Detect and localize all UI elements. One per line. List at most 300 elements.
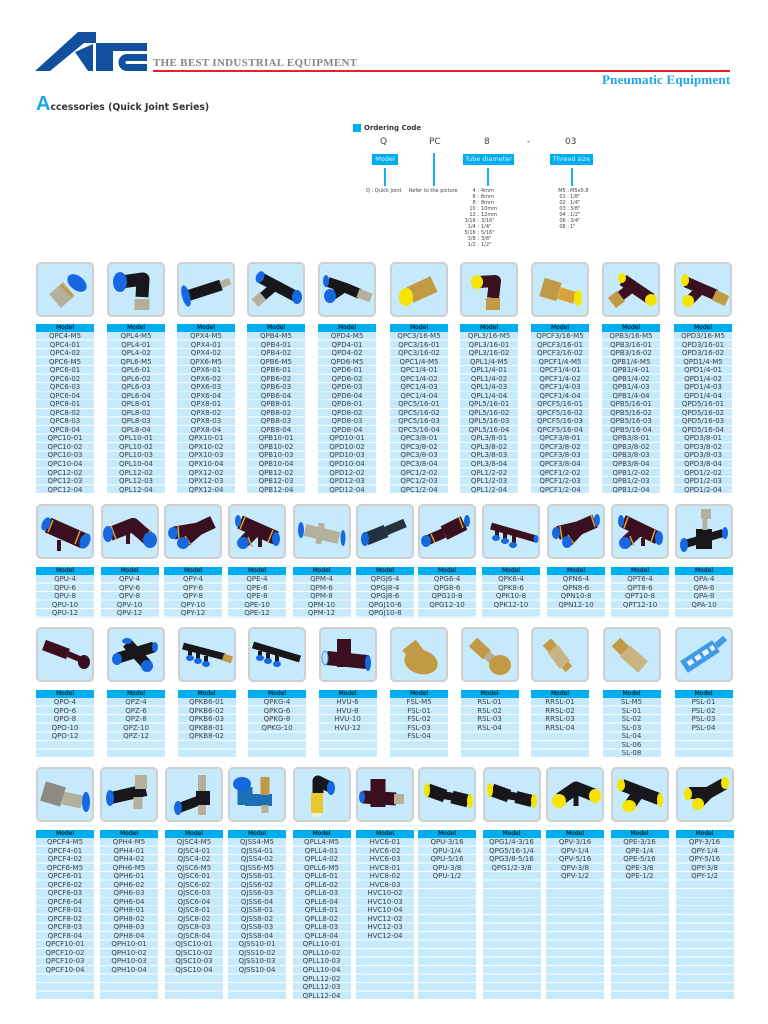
thread size list: 02 :	[559, 200, 569, 206]
table: HVU models: HVU-8	[336, 707, 359, 715]
table: QPL inch models: QPL3/16-02	[469, 349, 509, 357]
code parts: -	[527, 137, 530, 147]
table: QPO models: QPO-10	[52, 724, 78, 732]
table: QPH models: QPH10-02	[111, 949, 147, 957]
table: QPB models: QPB4-02	[261, 349, 291, 357]
table: QPV models: QPV-8	[119, 592, 140, 600]
table: QPB inch models: QPB1/4-04	[612, 392, 650, 400]
photo: QPG inch reducer	[482, 767, 540, 822]
photo: QPX fitting	[177, 262, 235, 317]
table: QPX models: QPX8-02	[191, 409, 221, 417]
table: QPU models: QPU-8	[54, 592, 76, 600]
table: QPD models: Model	[338, 324, 356, 331]
table: QPLL models: QPLL12-04	[303, 992, 340, 1000]
photo: QPN wye	[547, 504, 605, 559]
table: QPL models: QPL6-02	[121, 375, 151, 383]
table: QPC models: QPC12-03	[48, 477, 82, 485]
table: QPT models: QPT8-6	[627, 584, 653, 592]
table: QPV inch models	[546, 830, 604, 1000]
table: QPGJ models: QPGJ6-4	[371, 575, 399, 583]
tube diameter list: 3/8"	[481, 236, 491, 242]
table: QPL models: QPL6-03	[121, 383, 151, 391]
table: QPE models	[228, 566, 286, 618]
table: QPL models: QPL4-M5	[120, 332, 152, 340]
table: QPB inch models: QPB1/2-04	[612, 486, 650, 494]
table: QPO models: QPO-12	[52, 732, 78, 740]
table: QPT models: QPT12-10	[623, 600, 657, 608]
table: QPL models: QPL10-01	[119, 434, 153, 442]
table: QPL inch models: QPL3/8-01	[471, 434, 507, 442]
thread size list: 03 :	[559, 206, 569, 212]
column: QPCF	[36, 767, 94, 1000]
table: QPO models: QPO-8	[54, 715, 76, 723]
table: HVC models: HVC6-01	[370, 838, 400, 846]
table: QPCF inch models: QPCF3/8-03	[539, 451, 581, 459]
table: QPD models: QPD12-04	[329, 486, 365, 494]
table: QPCF models	[36, 830, 94, 1000]
table: HVC models: HVC12-03	[367, 923, 403, 931]
thread size list	[558, 188, 588, 230]
table: QPE inch models: QPE-5/16	[623, 855, 656, 863]
table: HVC models: HVC12-02	[367, 915, 403, 923]
table: QPLL models: QPLL4-01	[305, 847, 338, 855]
photo: QPG reducer	[418, 504, 476, 559]
table: QPCF inch models: QPCF3/8-01	[539, 434, 581, 442]
table: QPL models: QPL8-03	[121, 417, 151, 425]
table: QPY models: QPY-6	[183, 584, 203, 592]
table: QPL inch models: QPL1/2-04	[471, 486, 507, 494]
table: QPL models: QPL8-04	[121, 426, 151, 434]
table: QPY models: QPY-10	[181, 600, 205, 608]
table: QPX models: QPX6-04	[191, 392, 221, 400]
column: QPB inch	[602, 262, 660, 494]
table: QPO models: QPO-6	[54, 707, 76, 715]
table: QJSC models: QJSC10-02	[175, 949, 213, 957]
table: QPE models: QPE-8	[246, 592, 268, 600]
title: Accessories (Quick Joint Series): Accessories (Quick Joint Series)	[36, 93, 209, 115]
table: QPH models: QPH10-04	[111, 966, 147, 974]
table: QJSC models: QJSC10-03	[175, 957, 213, 965]
thread size list: M5x0.8	[570, 188, 588, 194]
column: QPT	[611, 504, 669, 617]
table: QPLL models: QPLL8-01	[305, 906, 338, 914]
column: QPV inch	[546, 767, 604, 1000]
tube diameter list: 12mm	[481, 212, 497, 218]
thread size list: 1/8"	[570, 194, 580, 200]
table: QPY inch models: QPY-3/16	[689, 838, 720, 846]
table: QPB models: QPB4-01	[261, 341, 291, 349]
table: QPD models: QPD6-M5	[331, 358, 363, 366]
table: QPD inch models: QPD5/16-01	[682, 400, 724, 408]
table: QPL inch models: QPL3/8-04	[471, 460, 507, 468]
table: QPK models: QPK6-4	[498, 575, 524, 583]
table: QJSS models: QJSS8-02	[241, 915, 273, 923]
table: QPL inch models: QPL3/8-03	[471, 451, 507, 459]
table: QPB models: QPB6-04	[261, 392, 291, 400]
table: QPKB models: QPKB6-01	[189, 698, 224, 706]
table: QPB models: QPB6-M5	[260, 358, 292, 366]
table: QPD models: QPD8-01	[331, 400, 362, 408]
photo: QPCF brass fitting	[531, 262, 589, 317]
table: QPM models: QPM-12	[308, 609, 335, 617]
ordering code icon	[353, 124, 361, 132]
column: QPC inch	[390, 262, 448, 494]
thread size list: 06 :	[559, 218, 569, 224]
table: QJSS models: QJSS10-04	[239, 966, 275, 974]
photo: QPB tee	[247, 262, 305, 317]
column: QPY	[164, 504, 222, 618]
ordering code heading: Ordering Code	[364, 124, 421, 132]
photo: QPM bulkhead	[292, 504, 350, 559]
table: QPY inch models	[676, 830, 734, 1000]
table: QPB models: QPB6-02	[261, 375, 291, 383]
table: QPY models	[164, 566, 222, 618]
table: QPC inch models: QPC1/4-02	[400, 375, 438, 383]
table: QPK models: QPK12-10	[494, 600, 528, 608]
table: QPD inch models: QPD3/16-02	[682, 349, 724, 357]
table: QPL inch models: QPL1/4-01	[471, 366, 507, 374]
table: QPC models: Model	[56, 324, 74, 331]
table: QPLL models: QPLL10-04	[303, 966, 340, 974]
table: QPL models: QPL12-02	[119, 468, 153, 476]
table: QPL models: QPL6-04	[121, 392, 151, 400]
table: QPLL models: QPLL12-02	[303, 974, 340, 982]
table: QPCF inch models: QPCF1/2-04	[539, 486, 581, 494]
table: QPU inch models	[418, 830, 476, 1000]
photo: QJSS speed controller	[228, 767, 286, 822]
table: QPC inch models: QPC1/2-04	[400, 486, 438, 494]
photo: QPD tee	[318, 262, 376, 317]
table: QPL models: QPL8-01	[121, 400, 151, 408]
table: QPB inch models: QPB3/16-02	[610, 349, 652, 357]
table: QPB models: QPB10-04	[259, 460, 293, 468]
table: QPH models: Model	[120, 830, 138, 837]
column: RRSL	[531, 627, 589, 758]
table: QPCF models: QPCF6-M5	[47, 864, 83, 872]
table: QPLL models: QPLL6-M5	[304, 864, 339, 872]
column: QPKG	[248, 627, 306, 758]
table: HVC models: HVC6-02	[370, 847, 400, 855]
table: QPE models: Model	[248, 567, 266, 574]
table: QPLL models: QPLL6-04	[305, 898, 338, 906]
table: QPU models: Model	[56, 567, 74, 574]
tube diameter list: 4mm	[481, 188, 494, 194]
table: QPB inch models: QPB3/16-01	[610, 341, 652, 349]
table: QPD models: QPD12-02	[329, 468, 365, 476]
table: QPCF inch models: QPCF3/8-04	[539, 460, 581, 468]
table: QJSC models: QJSC6-04	[178, 898, 210, 906]
column: QJSC	[165, 767, 223, 1000]
table: QPD inch models: QPD1/4-01	[684, 366, 722, 374]
table: QPC inch models: QPC3/16-02	[398, 349, 440, 357]
column: RSL	[460, 627, 518, 758]
table: QPGJ models: Model	[376, 567, 394, 574]
table: QPCF inch models: QPCF3/16-M5	[536, 332, 584, 340]
tube diameter list: 3/16 :	[464, 218, 479, 224]
column: QPA	[675, 504, 733, 617]
table: QPB inch models: QPB5/16-01	[610, 400, 652, 408]
table: QPU models: QPU-10	[52, 600, 78, 608]
table: QPY models: QPY-4	[183, 575, 203, 583]
table: QPY inch models: Model	[695, 830, 714, 837]
table: QPU inch models: QPU-1/2	[433, 872, 461, 880]
table: QPH models: QPH6-04	[114, 898, 144, 906]
table: QPE inch models: QPE-1/2	[626, 872, 653, 880]
table: QPB models: QPB6-03	[261, 383, 291, 391]
table: QPL inch models: QPL5/16-03	[469, 417, 509, 425]
table: QJSC models: QJSC10-04	[175, 966, 213, 974]
table: QPC models: QPC8-02	[50, 409, 80, 417]
photo: QPKB manifold	[178, 627, 236, 682]
table: QPY models: Model	[184, 567, 202, 574]
table: QPU inch models: Model	[438, 830, 456, 837]
table: QPA models: QPA-10	[691, 600, 717, 608]
table: QPLL models: QPLL8-03	[305, 923, 338, 931]
tube diameter list: 5/16 :	[464, 230, 479, 236]
photo: QPGJ reducer	[356, 504, 414, 559]
table: QPD inch models: QPD1/4-03	[684, 383, 722, 391]
table: HVU models: HVU-6	[336, 698, 359, 706]
photo: QPD inch tee	[674, 262, 732, 317]
table: QPX models: QPX4-02	[191, 349, 221, 357]
table: QPC inch models: QPC3/16-01	[398, 341, 440, 349]
photo: QPV elbow	[100, 504, 158, 559]
table: QPB models	[247, 324, 305, 494]
table: QPB inch models: Model	[622, 324, 640, 331]
table: QPD models: QPD6-04	[331, 392, 362, 400]
table: PSL models	[674, 690, 732, 758]
table: RRSL models	[531, 690, 589, 758]
table: QPK models	[482, 567, 540, 618]
photo: QPC brass fitting	[390, 262, 448, 317]
table: QPC inch models: QPC1/2-02	[400, 468, 438, 476]
table: HVC models	[356, 830, 414, 1000]
photo: QPY wye	[164, 504, 222, 559]
table: QPU models: QPU-4	[54, 575, 76, 583]
thread size list: 08 :	[559, 224, 569, 230]
table: QPCF inch models: QPCF3/8-02	[539, 443, 581, 451]
box: Model: Model	[375, 155, 395, 163]
table: QPG inch models	[482, 830, 540, 1000]
table: QPCF models: Model	[56, 830, 74, 837]
table: QPH models: QPH10-03	[111, 957, 147, 965]
table: QPC models: QPC10-01	[48, 434, 82, 442]
table: QPCF inch models: QPCF1/2-03	[539, 477, 581, 485]
table: QPL models: QPL10-04	[119, 460, 153, 468]
table: QPC inch models: QPC1/4-04	[400, 392, 438, 400]
table: QPV models	[101, 566, 159, 618]
table: QPCF models: QPCF8-01	[48, 906, 82, 914]
table: QPX models: QPX10-02	[189, 443, 223, 451]
table: HVU models: HVU-12	[334, 724, 361, 732]
table: QPO models	[36, 690, 94, 758]
table: QPH models: QPH10-01	[111, 940, 147, 948]
column: QPV	[101, 504, 159, 618]
table: RSL models	[460, 690, 518, 758]
table: QPB models: QPB8-03	[261, 417, 291, 425]
table: QPA models: QPA-8	[694, 592, 714, 600]
table: QPB inch models: QPB1/4-02	[612, 375, 650, 383]
column: PSL	[674, 627, 732, 758]
table: QPT models: Model	[631, 567, 649, 574]
table: QPZ models: QPZ-6	[125, 707, 147, 715]
table: QPLL models: QPLL4-02	[305, 855, 338, 863]
table: HVC models: HVC10-04	[367, 906, 403, 914]
box: Thread size	[550, 154, 593, 165]
table: QPGJ models: QPGJ8-4	[371, 584, 399, 592]
table: QJSC models	[165, 830, 223, 1000]
table: QJSS models: QJSS6-M5	[240, 864, 274, 872]
table: PSL models: PSL-03	[692, 715, 715, 723]
column: QPB	[247, 262, 305, 494]
table: QPU inch models: QPU-3/8	[433, 864, 461, 872]
thread size list: M5 :	[558, 188, 569, 194]
table: QPD models: QPD4-02	[331, 349, 362, 357]
table: QPC models: QPC6-M5	[49, 358, 81, 366]
table: QJSC models: QJSC4-M5	[177, 838, 211, 846]
table: QPX models: QPX12-02	[189, 468, 223, 476]
photo: FSL silencer	[390, 627, 448, 682]
photo: QPA speed controller	[675, 504, 733, 559]
tube diameter list: 10mm	[481, 206, 497, 212]
table: QPL models: QPL6-01	[121, 366, 151, 374]
table: QPB models: QPB6-01	[261, 366, 291, 374]
table: HVC models: HVC8-03	[370, 881, 400, 889]
table: QPB inch models: QPB3/8-02	[612, 443, 650, 451]
table: QPD models: QPD10-01	[329, 434, 365, 442]
table: QPKG models: QPKG-4	[264, 698, 290, 706]
section label: Pneumatic Equipment: Pneumatic Equipment	[602, 72, 730, 87]
table: QPD inch models: QPD3/8-01	[684, 434, 722, 442]
table: QPL inch models	[460, 324, 518, 494]
panel: ordering code	[353, 124, 593, 248]
thread size list: 01 :	[559, 194, 569, 200]
table: QPB inch models: QPB1/2-03	[612, 477, 650, 485]
table: QPH models: QPH4-02	[114, 855, 144, 863]
table: QPC inch models: QPC3/8-02	[400, 443, 438, 451]
column: QPCF inch	[531, 262, 589, 494]
table: QPV inch models: QPV-3/16	[559, 838, 591, 846]
column: QJSS	[228, 767, 286, 1000]
table: QPH models	[100, 830, 158, 1000]
table: QPL models: QPL10-02	[119, 443, 153, 451]
table: QPLL models: QPLL8-02	[305, 915, 338, 923]
table: QPX models: QPX8-03	[191, 417, 221, 425]
table: QPN models: QPN12-10	[558, 600, 594, 608]
table: QPL inch models: QPL1/2-02	[471, 468, 507, 476]
photo: HVC valve	[356, 767, 414, 822]
photo: QPL inch elbow	[460, 262, 518, 317]
column: QPZ	[107, 627, 165, 758]
table: SL models: SL-M5	[621, 698, 642, 706]
column: QPL inch	[460, 262, 518, 494]
table: RSL models: Model	[480, 690, 498, 697]
column: QPKB	[178, 627, 236, 758]
box: Model	[372, 154, 398, 165]
code parts: 8	[484, 137, 490, 147]
table: QPL inch models: QPL3/16-M5	[468, 332, 510, 340]
photo: QPT tee	[611, 504, 669, 559]
table: QPZ models: QPZ-8	[125, 715, 147, 723]
table: QPT models: QPT10-8	[625, 592, 655, 600]
table: QPM models: Model	[312, 567, 330, 574]
table: QPB inch models: QPB3/8-03	[612, 451, 650, 459]
table: QJSC models: QJSC8-02	[178, 915, 210, 923]
table: QPCF inch models: QPCF5/16-03	[537, 417, 583, 425]
table: QPO models: Model	[56, 690, 74, 697]
table: QPCF inch models: QPCF1/4-03	[539, 383, 581, 391]
table: QJSC models: QJSC4-01	[178, 847, 210, 855]
table: QPC models: QPC4-02	[50, 349, 80, 357]
table: QJSS models: QJSS4-M5	[240, 838, 274, 846]
table: QPC models: QPC10-04	[48, 460, 82, 468]
table: QPL inch models: QPL5/16-01	[469, 400, 509, 408]
table: HVU models: HVU-10	[334, 715, 361, 723]
table: QPL models: QPL8-02	[121, 409, 151, 417]
photo: QPL elbow	[107, 262, 165, 317]
table: QPZ models: QPZ-12	[123, 732, 149, 740]
table: QPC models: QPC8-04	[50, 426, 80, 434]
tube diameter list: 8mm	[481, 200, 494, 206]
table: QPG models: QPG10-8	[431, 592, 463, 600]
table: RRSL models: Model	[551, 690, 569, 697]
table: QPD inch models: QPD1/4-02	[684, 375, 722, 383]
table: QPH models: QPH6-02	[114, 881, 144, 889]
table: PSL models: PSL-01	[692, 698, 715, 706]
table: QPLL models: QPLL10-01	[303, 940, 340, 948]
table: QPN models: Model	[567, 567, 585, 574]
table: QPB inch models: QPB3/8-01	[612, 434, 650, 442]
table: QPC models: QPC4-M5	[49, 332, 81, 340]
table: QPX models: QPX10-03	[189, 451, 223, 459]
table: QPD models: QPD10-02	[329, 443, 365, 451]
table: RRSL models: RRSL-03	[545, 715, 575, 723]
table: QPY models: QPY-8	[183, 592, 203, 600]
table: QPG inch models: QPG1/2-3/8	[491, 864, 532, 872]
table: QPZ models: Model	[127, 690, 145, 697]
table: QPD inch models: QPD5/16-03	[682, 417, 724, 425]
photo: QPO plug	[36, 627, 94, 682]
table: QPLL models: Model	[312, 830, 330, 837]
table: QPB inch models: QPB5/16-04	[610, 426, 652, 434]
table: QPCF inch models: QPCF1/4-04	[539, 392, 581, 400]
table: FSL models: FSL-03	[407, 724, 431, 732]
table: QJSS models: QJSS4-01	[241, 847, 273, 855]
table: QPX models	[177, 324, 235, 494]
table: QJSC models: QJSC8-01	[178, 906, 210, 914]
table: QPC models: QPC4-01	[50, 341, 80, 349]
table: QPL models: QPL4-02	[121, 349, 151, 357]
table: QPB inch models: QPB1/4-01	[612, 366, 650, 374]
table: QJSS models: QJSS10-02	[239, 949, 275, 957]
table: QPE inch models: QPE-1/4	[626, 847, 653, 855]
table: QJSS models: QJSS8-03	[241, 923, 273, 931]
table: QPC inch models: QPC5/16-02	[398, 409, 440, 417]
table: QJSC models: QJSC10-01	[175, 940, 213, 948]
table: QPCF models: QPCF6-03	[48, 889, 82, 897]
column: FSL	[390, 627, 448, 758]
table: HVU models	[318, 690, 376, 758]
table: QPC models	[36, 324, 94, 494]
table: SL models: SL-02	[622, 715, 641, 723]
table: QPLL models: QPLL8-04	[305, 932, 338, 940]
table: QJSS models: QJSS8-01	[241, 906, 273, 914]
table: QPD models: QPD8-03	[331, 417, 362, 425]
column: QPL	[107, 262, 165, 494]
table: QPY inch models: QPY-3/8	[691, 864, 718, 872]
table: QPX models: QPX6-01	[191, 366, 221, 374]
table: QPKG models: QPKG-8	[264, 715, 290, 723]
